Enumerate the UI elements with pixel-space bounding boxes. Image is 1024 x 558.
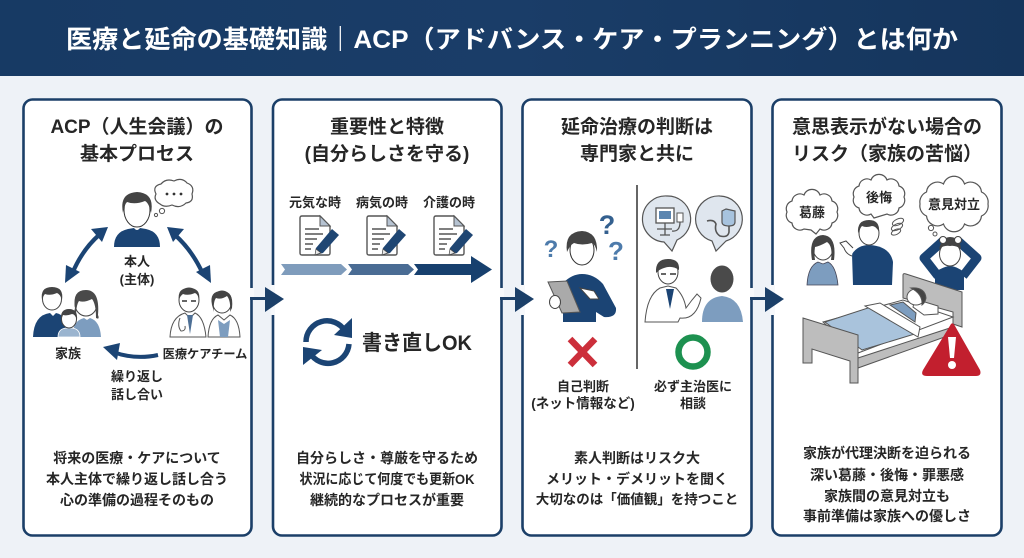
- panel: risks without expressed wishes: [772, 100, 1002, 536]
- icon: red cross: [570, 339, 595, 365]
- icon: warning triangle: [922, 323, 980, 376]
- bubble: conflict: [786, 189, 838, 234]
- icon: distressed man: [924, 236, 977, 290]
- label: self judgement: 自己判断: [557, 379, 609, 394]
- icon: worried woman: [807, 235, 838, 285]
- panel 4 heading: リスク（家族の苦悩）: [792, 143, 982, 165]
- panel 4 heading: [792, 115, 982, 165]
- arrow: self to family: [65, 227, 108, 283]
- icon: rewrite cycle: [303, 318, 352, 365]
- text block: panel 4 summary: 事前準備は家族への優しさ: [803, 508, 971, 524]
- label: consult doctor: 相談: [680, 396, 706, 411]
- label: family: 家族: [55, 346, 81, 361]
- panel 3 heading: 延命治療の判断は: [561, 116, 713, 138]
- text block: panel 4 summary: 深い葛藤・後悔・罪悪感: [810, 467, 964, 483]
- header banner: [0, 0, 1024, 76]
- label: repeated discussion: 話し合い: [111, 387, 163, 402]
- panel 2 heading: (自分らしさを守る): [305, 143, 469, 165]
- panel: life-prolonging decisions: [522, 100, 752, 536]
- timeline labels: 病気の時: [356, 195, 408, 210]
- timeline labels: 元気な時: [289, 195, 341, 210]
- bubble: conflict: 葛藤: [799, 205, 825, 220]
- panel 2 heading: 重要性と特徴: [330, 116, 444, 138]
- icon: person with tablet and question marks: ?: [544, 236, 558, 263]
- label: self judgement: [531, 379, 635, 411]
- text block: panel 3 summary: 大切なのは「価値観」を持つこと: [536, 491, 738, 507]
- text block: panel 4 summary: 家族が代理決断を迫られる: [803, 445, 971, 461]
- title: 医療と延命の基礎知識｜ACP（アドバンス・ケア・プランニング）とは何か: [66, 25, 958, 54]
- icon: person with tablet and question marks: ?: [608, 236, 624, 266]
- text block: panel 1 summary: 将来の医療・ケアについて: [53, 450, 221, 466]
- icon: family: [33, 287, 101, 337]
- label: care team: 医療ケアチーム: [163, 346, 247, 361]
- icon: medical care team: [170, 288, 240, 337]
- arrow: panel 1 to 2: [250, 285, 284, 315]
- text block: panel 3 summary: メリット・デメリットを聞く: [546, 471, 728, 487]
- label: consult doctor: [654, 379, 732, 411]
- text block: panel 1 summary: 心の準備の過程そのもの: [60, 492, 214, 508]
- text block: panel 2 summary: 自分らしさ・尊厳を守るため: [296, 450, 478, 466]
- panel 4 heading: 意思表示がない場合の: [792, 115, 982, 138]
- panel 3 heading: [561, 116, 713, 165]
- label: rewrite OK: 書き直しOK: [362, 332, 472, 355]
- text block: panel 2 summary: 状況に応じて何度でも更新OK: [300, 471, 474, 487]
- panel 2 heading: [305, 116, 469, 165]
- timeline labels: 介護の時: [423, 195, 475, 210]
- icon: person with thought bubble: [114, 179, 193, 247]
- icon: regretful man: [840, 217, 905, 285]
- panel: ACP basic process: [24, 100, 252, 536]
- text block: panel 2 summary: [296, 450, 478, 508]
- text block: panel 3 summary: [536, 450, 738, 507]
- panel 3 heading: 専門家と共に: [580, 143, 694, 165]
- icon: monitor bubble: [642, 196, 691, 251]
- arrow: panel 2 to 3: [500, 285, 534, 315]
- label: self judgement: (ネット情報など): [531, 395, 635, 411]
- bubble: disagreement: [920, 176, 988, 236]
- label: self: [120, 254, 154, 287]
- panel: importance and features: [273, 100, 502, 536]
- text block: panel 1 summary: [46, 450, 228, 508]
- panel 1 heading: ACP（人生会議）の: [50, 116, 224, 138]
- icon: documents: [300, 216, 473, 255]
- label: consult doctor: 必ず主治医に: [654, 379, 732, 394]
- panel 1 heading: 基本プロセス: [80, 143, 194, 165]
- arrow: self to care team: [167, 227, 211, 283]
- icon: person with tablet and question marks: [544, 210, 624, 322]
- icon: doctor and patient: [645, 259, 743, 322]
- label: repeated discussion: [111, 369, 163, 402]
- timeline labels: [289, 195, 475, 210]
- bubble: regret: 後悔: [866, 190, 892, 205]
- timeline arrow: [281, 256, 492, 283]
- icon: IV bubble: [696, 196, 742, 251]
- text block: panel 4 summary: [803, 445, 971, 524]
- panel 1 heading: [50, 116, 224, 165]
- arrow: repeated discussion: [103, 343, 158, 360]
- icon: bed with patient: [803, 274, 962, 383]
- text block: panel 4 summary: 家族間の意見対立も: [824, 488, 950, 504]
- text block: panel 1 summary: 本人主体で繰り返し話し合う: [46, 471, 228, 487]
- text block: panel 2 summary: 継続的なプロセスが重要: [310, 492, 464, 508]
- icon: person with tablet and question marks: ?: [599, 210, 615, 240]
- bubble: regret: [853, 174, 905, 218]
- icon: green circle: [678, 338, 708, 366]
- divider: [636, 185, 638, 369]
- label: self: (主体): [120, 272, 154, 287]
- arrow: panel 3 to 4: [750, 285, 784, 315]
- label: self: 本人: [124, 254, 150, 269]
- text block: panel 3 summary: 素人判断はリスク大: [574, 450, 700, 466]
- label: repeated discussion: 繰り返し: [111, 369, 163, 384]
- bubble: disagreement: 意見対立: [928, 197, 980, 212]
